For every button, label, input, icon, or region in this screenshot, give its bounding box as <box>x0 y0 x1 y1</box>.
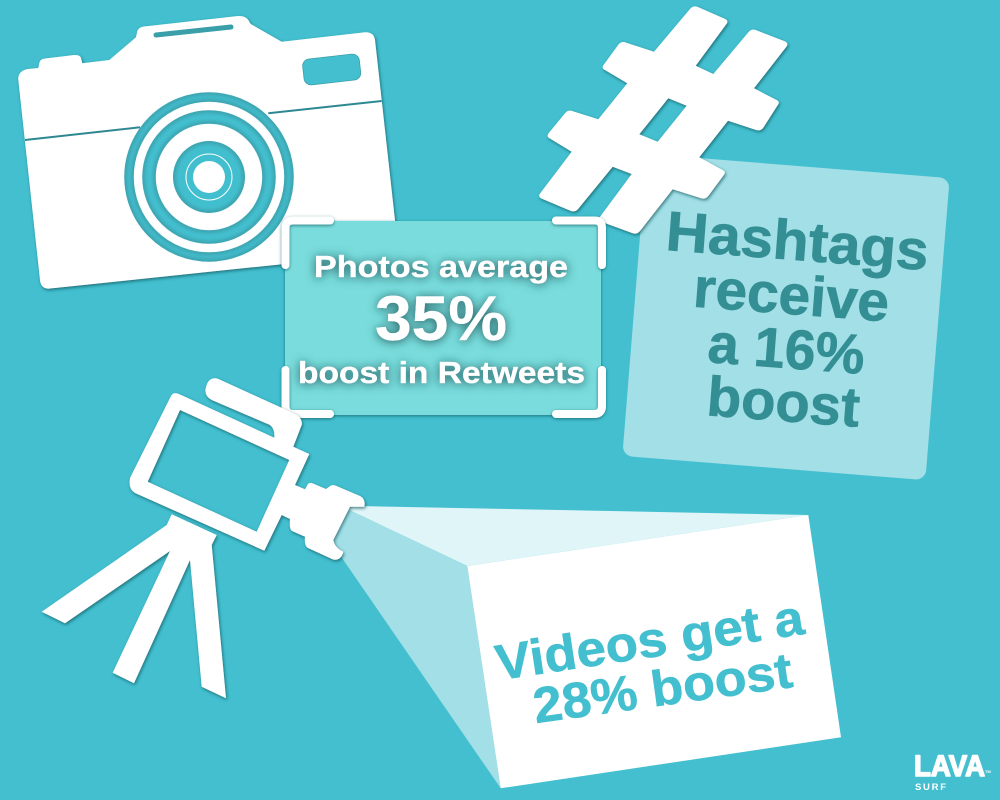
projector beam and screen <box>333 506 841 788</box>
icon: video camera on tripod <box>42 378 365 698</box>
logo: LAVA Surf <box>914 750 991 793</box>
panel: hashtag boost <box>622 154 950 480</box>
photos boost text: 35% <box>375 284 507 354</box>
projection screen <box>467 515 841 788</box>
viewfinder window <box>302 53 361 86</box>
photos boost text <box>298 249 585 390</box>
logo subtitle: SURF <box>915 782 946 793</box>
hashtag boost text: boost <box>705 364 862 439</box>
beam top wall <box>345 506 808 566</box>
videos boost text: Videos get a <box>492 589 809 691</box>
icon: hashtag <box>539 6 787 234</box>
tripod legs <box>42 514 226 698</box>
camera body and lens <box>130 378 365 560</box>
logo wordmark: LAVA <box>914 750 985 783</box>
icon: photo camera <box>18 16 399 289</box>
viewfinder corner brackets <box>286 220 602 414</box>
trademark mark: TM <box>985 769 991 774</box>
videos boost text: 28% boost <box>530 642 796 734</box>
camera body <box>18 16 399 289</box>
panel background <box>285 221 601 415</box>
videos boost text <box>492 589 809 734</box>
panel: photos boost <box>285 220 602 415</box>
hashtag boost text: a 16% <box>706 311 867 386</box>
body seam <box>25 101 382 140</box>
beam left wall <box>333 508 501 788</box>
hashtag boost text: receive <box>691 256 892 333</box>
hashtag boost text: Hashtags <box>664 199 931 282</box>
photos boost text: Photos average <box>314 249 568 284</box>
panel background <box>622 154 950 480</box>
lens rings <box>129 97 289 257</box>
flash slot <box>156 27 231 35</box>
hashtag boost text <box>664 199 931 439</box>
photos boost text: boost in Retweets <box>298 355 585 390</box>
